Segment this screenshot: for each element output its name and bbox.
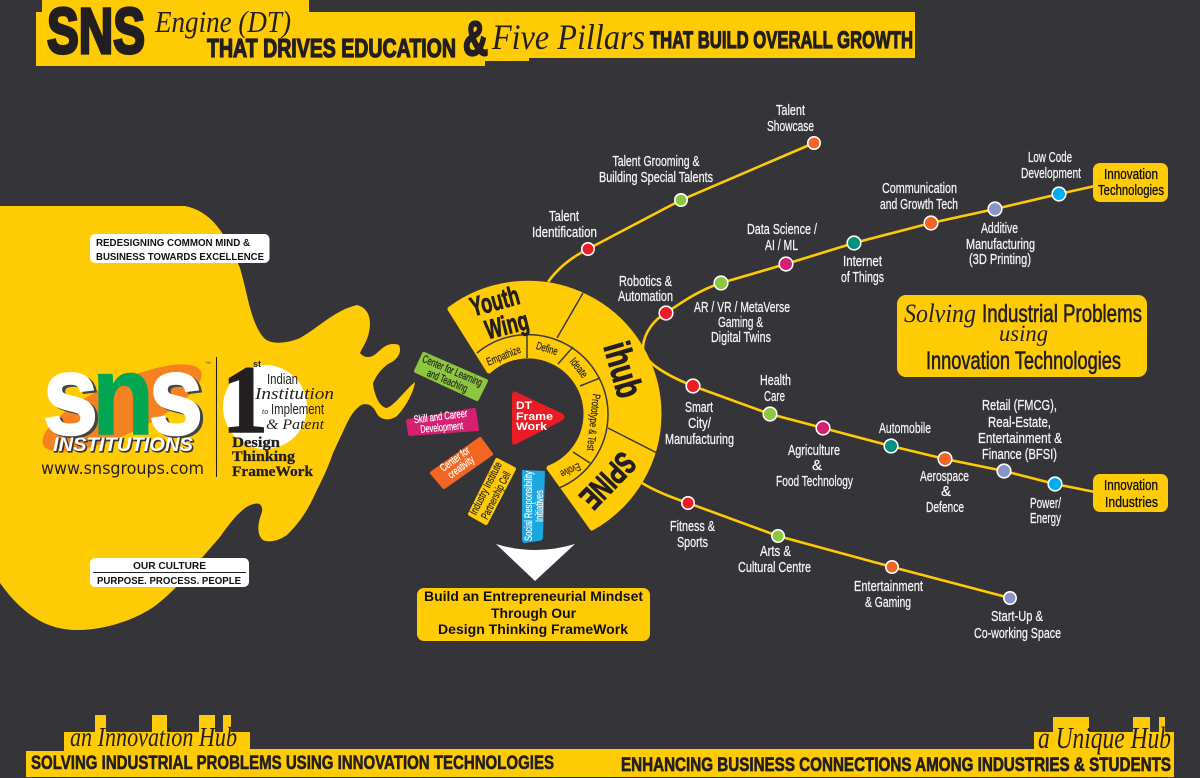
callout: our culture: PURPOSE. PROCESS. PEOPLE <box>97 576 241 587</box>
tag: Social Responsibility Initiatives <box>522 470 546 543</box>
callout: redesigning common mind <box>90 234 270 263</box>
tag: Center for creativity: creativity <box>446 454 477 481</box>
SNS Institutions logo: n <box>92 333 154 458</box>
node: Power Energy: Energy <box>1030 510 1061 527</box>
node: Start-Up and Co-working Space <box>974 592 1061 642</box>
callout: solving industrial problems: Industrial Problems <box>982 300 1142 328</box>
node: Smart City Manufacturing <box>665 379 734 448</box>
title banner: THAT DRIVES EDUCATION <box>207 33 456 63</box>
badge: 1st Indian Institution: Institution <box>254 384 334 403</box>
node: Health Care: Health <box>760 372 791 389</box>
node: Power Energy: Power/ <box>1030 495 1062 512</box>
node: Retail Real-Estate Entertainment Finance: Entertainment & <box>978 430 1062 447</box>
SNS Institutions logo: www.snsgroups.com <box>41 459 204 479</box>
arrow: white down triangle <box>496 544 575 581</box>
node: Talent Showcase <box>767 102 820 149</box>
badge: 1st Indian Institution <box>222 346 334 480</box>
node: Aerospace and Defence: & <box>941 483 951 500</box>
node: Agriculture and Food Technology: Food Technology <box>776 473 853 490</box>
node: Automobile: Automobile <box>879 420 931 437</box>
label: Innovation Technologies: Technologies <box>1098 182 1164 199</box>
tag: Industry Institute Partnership Cell: Partnership Cell <box>479 470 513 522</box>
SNS Institutions logo: s <box>152 335 206 460</box>
node: Aerospace and Defence: Aerospace <box>920 468 969 485</box>
node: Robotics and Automation <box>618 273 673 320</box>
badge: 1st Indian Institution: FrameWork <box>232 464 314 480</box>
tag: Center for Learning and Teaching: Center for Learning <box>420 353 484 389</box>
node: Communication and Growth Tech: Communication <box>882 180 957 197</box>
node: AR VR MetaVerse: AR / VR / MetaVerse <box>694 299 790 316</box>
badge: 1st Indian Institution: Implement <box>271 401 325 418</box>
callout: solving industrial problems: Solving <box>904 299 976 328</box>
node: Fitness and Sports <box>670 497 715 551</box>
icon: DT FrameWork play triangle: Work <box>516 421 548 433</box>
node: Arts and Cultural Centre: Arts & <box>760 543 791 560</box>
callout: entrepreneurial mindset <box>417 588 650 641</box>
node: Health Care: Care <box>764 388 785 405</box>
tag: Industry Institute Partnership Cell <box>468 460 514 523</box>
node: Smart City Manufacturing: Manufacturing <box>665 431 734 448</box>
node: Retail Real-Estate Entertainment Finance: Finance (BFSI) <box>982 446 1057 463</box>
node: Talent Identification: Talent <box>549 208 580 225</box>
node: Talent Identification: Identification <box>532 224 597 241</box>
label: Innovation Industries: Innovation <box>1104 477 1158 494</box>
branch lines <box>548 143 1095 598</box>
node: Aerospace and Defence: Defence <box>926 499 964 516</box>
SNS Institutions logo: TM <box>205 360 211 365</box>
label: Innovation Industries: Industries <box>1105 494 1158 511</box>
callout: redesigning common mind: BUSINESS TOWARDS EXCELLENCE <box>96 252 264 263</box>
title banner: THAT BUILD OVERALL GROWTH <box>650 27 913 54</box>
callout: redesigning common mind: REDESIGNING COMMON MIND & <box>96 238 250 249</box>
wheel stages <box>485 340 602 479</box>
label: Innovation Industries <box>1093 474 1168 512</box>
badge: 1st Indian Institution: & Patent <box>266 417 325 433</box>
callout: entrepreneurial mindset: Through Our <box>491 605 577 621</box>
tag: Social Responsibility Initiatives: Initiatives <box>534 490 546 522</box>
node: AR VR MetaVerse: Digital Twins <box>711 329 771 346</box>
callout: entrepreneurial mindset: Design Thinking FrameWork <box>438 621 628 637</box>
callout: solving industrial problems: Innovation Technologies <box>926 347 1121 375</box>
node: Additive Manufacturing: Additive <box>981 220 1018 237</box>
SNS Institutions logo: INSTITUTIONS <box>54 436 194 457</box>
tag: Center for Learning and Teaching <box>416 353 486 399</box>
node: Fitness and Sports: Sports <box>677 534 708 551</box>
wheel stages: Ideate <box>567 356 590 381</box>
node: Communication and Growth Tech <box>880 180 958 230</box>
node: Additive Manufacturing <box>966 202 1035 268</box>
node: Low Code Development: Low Code <box>1028 149 1072 166</box>
node: Additive Manufacturing: Manufacturing <box>966 236 1035 253</box>
node: Talent Showcase: Talent <box>776 102 806 119</box>
wheel segment: SPINE: SPINE <box>573 445 643 516</box>
node: Data Science: Data Science / <box>747 221 818 238</box>
icon: DT FrameWork play triangle: DT <box>516 400 532 412</box>
label: Innovation Technologies: Innovation <box>1104 166 1158 183</box>
yellow splash shape <box>0 206 415 630</box>
SNS Institutions logo: s <box>46 335 101 460</box>
title banner: Engine (DT) <box>154 4 291 39</box>
SNS Institutions logo: s <box>43 333 98 458</box>
node: Automobile <box>879 420 931 453</box>
node: Arts and Cultural Centre: Cultural Centre <box>738 559 811 576</box>
wheel stages: Evolve <box>558 460 582 479</box>
node: Smart City Manufacturing: City/ <box>688 415 712 432</box>
node: Retail Real-Estate Entertainment Finance: Retail (FMCG), <box>982 397 1057 414</box>
wheel stages: Empathize <box>485 344 523 369</box>
footer banner: SOLVING INDUSTRIAL PROBLEMS USING INNOVATION TECHNOLOGIES <box>31 753 554 774</box>
node: Low Code Development: Development <box>1021 165 1082 182</box>
node: Robotics and Automation: Robotics & <box>619 273 672 290</box>
callout: entrepreneurial mindset: Build an Entrepreneurial Mindset <box>424 588 643 604</box>
badge: 1st Indian Institution: Thinking <box>232 449 296 465</box>
node: Aerospace and Defence <box>920 452 969 516</box>
callout: our culture: OUR CULTURE <box>133 561 206 572</box>
SNS Institutions logo: INSTITUTIONS <box>53 435 193 456</box>
wheel stages: Define <box>535 340 559 358</box>
wheel stages: Prototype & Test <box>584 393 602 451</box>
node: Start-Up and Co-working Space: Co-working Space <box>974 625 1061 642</box>
node: Talent Grooming <box>599 153 713 206</box>
node: Internet of Things: of Things <box>841 269 884 286</box>
node: Data Science: AI / ML <box>765 237 798 254</box>
node: Entertainment and Gaming: & Gaming <box>865 594 911 611</box>
badge: 1st Indian Institution: Indian <box>267 371 298 388</box>
node: Entertainment and Gaming: Entertainment <box>854 578 924 595</box>
tag: Social Responsibility Initiatives: Social Responsibility <box>523 471 535 541</box>
wheel segment: Youth Wing <box>467 280 532 345</box>
callout: solving industrial problems: using <box>999 321 1048 346</box>
SNS Institutions logo: s <box>149 333 203 458</box>
node: Retail Real-Estate Entertainment Finance: Real-Estate, <box>988 414 1051 431</box>
wheel segment: Youth Wing: Wing <box>482 305 532 345</box>
node: AR VR MetaVerse: Gaming & <box>718 314 763 331</box>
node: Retail Real-Estate Entertainment Finance <box>978 397 1062 478</box>
circular framework wheel <box>450 280 659 528</box>
node: Start-Up and Co-working Space: Start-Up & <box>991 608 1043 625</box>
badge: 1st Indian Institution: st <box>253 359 261 369</box>
node: Agriculture and Food Technology <box>776 421 853 490</box>
wheel segment: ihub: ihub <box>596 337 650 402</box>
node: Talent Grooming: Building Special Talents <box>599 169 713 186</box>
badge: 1st Indian Institution: to <box>262 407 268 416</box>
icon: DT FrameWork play triangle <box>513 392 564 444</box>
tag: Skill and Career Development: Development <box>420 420 464 436</box>
icon: DT FrameWork play triangle: Frame <box>516 411 553 423</box>
node: Entertainment and Gaming <box>854 561 924 611</box>
node: Internet of Things <box>841 236 884 286</box>
tag: Center for Learning and Teaching: and Teaching <box>425 367 469 395</box>
title banner: Five Pillars <box>491 17 645 57</box>
title banner: & <box>463 13 488 66</box>
tag: Center for creativity <box>432 439 491 487</box>
wheel segment: Youth Wing: Youth <box>467 280 523 322</box>
node: Agriculture and Food Technology: Agriculture <box>788 442 840 459</box>
node: Communication and Growth Tech: and Growth Tech <box>880 196 958 213</box>
node: Robotics and Automation: Automation <box>618 288 673 305</box>
tag: Center for creativity: Center for <box>438 445 473 474</box>
SNS Institutions logo <box>32 333 212 479</box>
node: Talent Showcase: Showcase <box>767 118 814 135</box>
footer banner <box>26 715 1174 777</box>
node: Smart City Manufacturing: Smart <box>685 399 714 416</box>
node: Additive Manufacturing: (3D Printing) <box>969 251 1031 268</box>
title banner <box>36 0 915 67</box>
node: Health Care <box>760 372 791 421</box>
node: Arts and Cultural Centre <box>738 530 811 576</box>
node: Data Science <box>747 221 818 271</box>
tag: Skill and Career Development <box>408 408 477 436</box>
callout: our culture <box>90 558 249 587</box>
callout: solving industrial problems <box>897 295 1147 377</box>
footer banner: an Innovation Hub <box>70 722 237 752</box>
tag: Industry Institute Partnership Cell: Industry Institute <box>468 460 505 517</box>
node: Fitness and Sports: Fitness & <box>670 518 715 535</box>
tag: Skill and Career Development: Skill and Career <box>413 408 468 426</box>
divider <box>216 357 218 477</box>
badge: 1st Indian Institution: 1 <box>222 346 268 453</box>
node: Talent Identification <box>532 208 597 255</box>
node: Low Code Development <box>1021 149 1082 201</box>
node: AR VR MetaVerse <box>694 276 790 346</box>
node: Agriculture and Food Technology: & <box>812 457 822 474</box>
node: Power Energy <box>1030 477 1062 527</box>
node: Internet of Things: Internet <box>843 253 883 270</box>
label: Innovation Technologies <box>1093 163 1168 202</box>
node: Talent Grooming: Talent Grooming & <box>612 153 700 170</box>
badge: 1st Indian Institution: Design <box>232 435 281 451</box>
